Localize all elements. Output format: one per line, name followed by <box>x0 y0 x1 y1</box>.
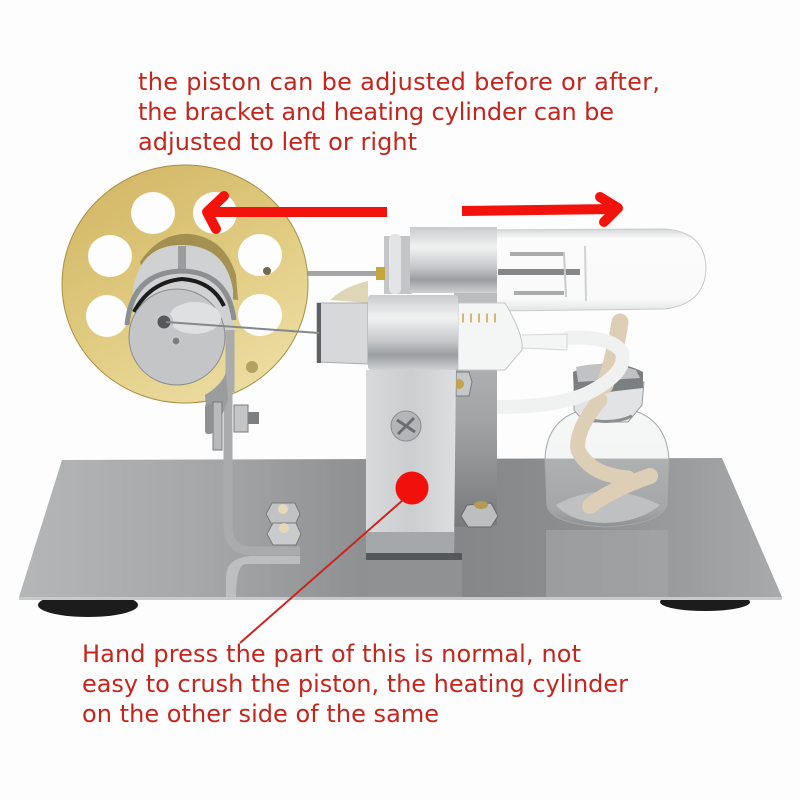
top caption: adjusted to left or right <box>138 128 417 156</box>
inner displacer in tube <box>498 246 586 301</box>
rear cylinder <box>376 227 497 294</box>
flywheel bracket <box>228 330 300 551</box>
left arrow <box>207 196 387 229</box>
bottom caption: Hand press the part of this is normal, not <box>82 640 581 668</box>
pointer line from dot to caption <box>240 500 403 643</box>
rear support bracket <box>454 290 497 527</box>
tube connector <box>522 334 567 350</box>
base plate feet <box>38 593 750 617</box>
bottom caption: easy to crush the piston, the heating cylinder <box>82 670 628 698</box>
heating glass tube <box>495 229 706 311</box>
bracket arm <box>205 372 228 420</box>
bottom caption <box>82 640 628 728</box>
front support bracket <box>366 370 462 560</box>
right arrow <box>462 197 618 222</box>
top caption <box>138 68 660 156</box>
rear bracket nut and bolt <box>454 372 498 527</box>
top caption: the piston can be adjusted before or after, <box>138 68 660 96</box>
red dot marker <box>396 472 428 504</box>
flywheel hub and crank <box>127 245 234 385</box>
flywheel <box>62 165 308 403</box>
silicone tube <box>497 338 623 407</box>
front cylinder with syringe <box>317 281 522 370</box>
oil lamp glass jar <box>545 364 669 527</box>
rear rod <box>300 271 384 276</box>
base plate <box>19 458 782 600</box>
wick <box>578 322 650 506</box>
connecting rod <box>166 322 319 333</box>
bracket nuts <box>205 402 301 545</box>
plate reflections <box>226 530 668 597</box>
bottom caption: on the other side of the same <box>82 700 439 728</box>
top caption: the bracket and heating cylinder can be <box>138 98 614 126</box>
